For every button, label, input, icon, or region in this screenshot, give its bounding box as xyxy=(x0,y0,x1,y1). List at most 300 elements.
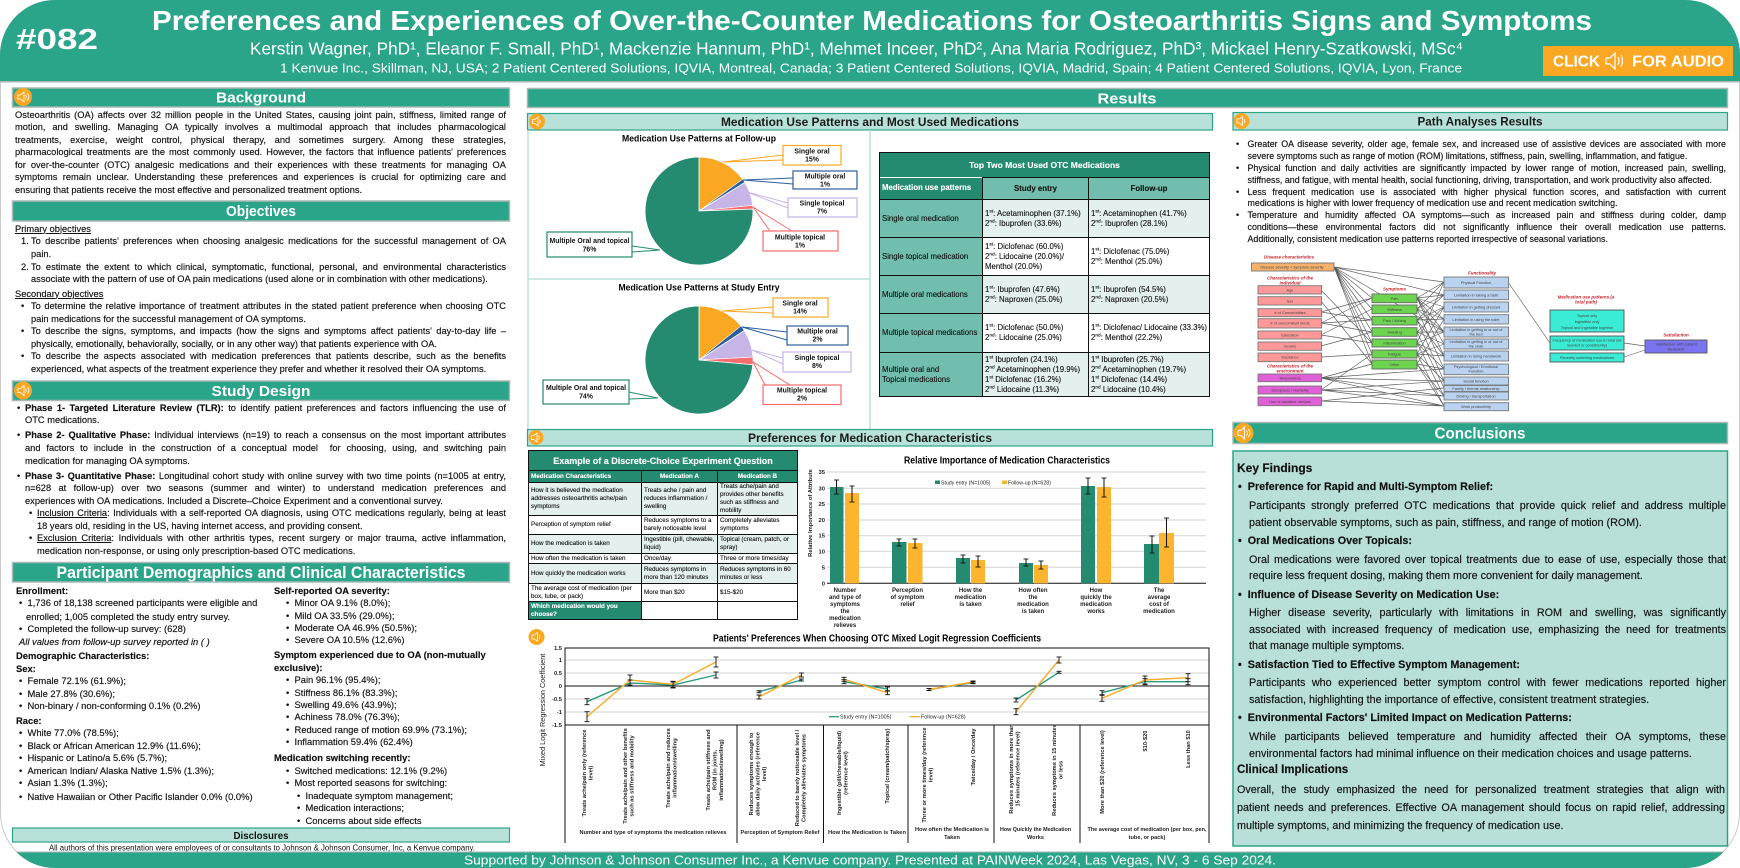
table: discrete-choice experiment example: Topical (cream, patch, or spray) xyxy=(720,536,789,551)
path analysis diagram: Characteristics of the xyxy=(1267,364,1314,368)
subheading: preferences for medication characteristics: Preferences for Medication Characteristics xyxy=(748,433,992,445)
authors: Kerstin Wagner, PhD¹, Eleanor F. Small, PhD¹, Mackenzie Hannum, PhD¹, Mehmet Inceer, PhD², Ana Maria Rodriguez, PhD³, Mickael Henry-Szatkowski, MSc⁴ xyxy=(250,38,1463,58)
subheading: medication use patterns: Medication Use Patterns and Most Used Medications xyxy=(721,117,1019,129)
rotated option labels: Treats ache/pain and reduces xyxy=(666,728,672,808)
rotated option labels: Three or more times/day (reference xyxy=(922,727,928,823)
path analysis diagram: Symptoms xyxy=(1383,286,1406,292)
table: top two most used OTC medications: Multiple oral and xyxy=(882,364,939,374)
attribute labels: Taken xyxy=(944,835,960,841)
table: top two most used OTC medications: Medication use patterns xyxy=(882,183,971,192)
table: top two most used OTC medications: Single topical medication xyxy=(882,252,968,260)
line chart: regression coefficients: -1 xyxy=(557,710,563,716)
subheading: preferences for medication characteristics xyxy=(528,430,1212,446)
panel: path analyses text: conditions—these environmental factors did not significantly influence their overall medication use patterns. xyxy=(1248,222,1726,232)
attribute labels: How often the Medication is xyxy=(915,827,989,833)
line chart: regression coefficients: 0 xyxy=(559,684,562,690)
rotated option labels: level) xyxy=(928,768,934,782)
x axis labels: relief xyxy=(900,602,916,608)
panel: objectives text: experienced, what aspects of the treatment experience they prefer and whether it resolved their OA symptoms. xyxy=(31,364,486,374)
panel: study design text: and factors to include in the construction of a conceptual model for choosing, using, and switching pain xyxy=(25,443,506,453)
line chart: regression coefficients: 0.5 xyxy=(554,671,563,677)
chart title: Relative Importance of Medication Characteristics xyxy=(904,456,1110,466)
column: severity, symptoms and switching: Symptom experienced due to OA (non-mutually xyxy=(274,649,486,660)
path analysis diagram: Pain / Aching xyxy=(1383,318,1406,323)
finding: disease severity: that manage multiple symptoms. xyxy=(1249,640,1404,652)
column: enrollment and demographics: • White 77.0% (78.5%); xyxy=(19,727,119,738)
table: top two most used OTC medications: 2nd: Naproxen (20.5%) xyxy=(1091,294,1168,304)
path analysis diagram: needed or consistently) xyxy=(1567,342,1608,348)
callouts: follow-up: Single oral xyxy=(794,148,830,156)
column: enrollment and demographics: All values from follow-up survey reported in ( ) xyxy=(19,636,210,647)
finding: environmental factors xyxy=(1238,712,1726,760)
panel: objectives text: 1. xyxy=(21,236,29,246)
attribute labels xyxy=(580,827,1207,841)
column: enrollment and demographics xyxy=(16,584,257,802)
conclusions panel background xyxy=(1233,451,1728,846)
table: top two most used OTC medications: 2nd: Menthol (22.2%) xyxy=(1091,333,1162,342)
table: top two most used OTC medications: 2nd: Ibuprofen (33.6%) xyxy=(985,218,1061,228)
path analysis diagram: Limitation in getting in or out of xyxy=(1450,339,1503,344)
panel: study design text: • xyxy=(29,533,32,543)
rotated option labels: 15 minutes (reference level) xyxy=(1016,731,1022,806)
table: discrete-choice experiment example: How the medication is taken xyxy=(531,540,610,547)
column: enrollment and demographics: • Black or African American 12.9% (11.6%); xyxy=(19,740,201,751)
table: top two most used OTC medications: 2nd: Menthol (25.0%) xyxy=(1091,256,1162,266)
table: discrete-choice experiment example: How often the medication is taken xyxy=(531,554,626,562)
panel: study design text: 18 years old, residing in the US, having internet access, and providing consent. xyxy=(37,521,363,531)
panel: conclusions text xyxy=(1237,460,1726,832)
column: severity, symptoms and switching xyxy=(274,584,486,826)
heading: background xyxy=(12,88,510,107)
panel: path analyses text: medications is higher with lower frequency of medication use and recent medication switching. xyxy=(1248,198,1617,208)
finding: disease severity: • Influence of Disease Severity on Medication Use: xyxy=(1238,589,1499,601)
panel: study design text: • xyxy=(29,508,32,518)
column: severity, symptoms and switching: • Medication interactions; xyxy=(297,802,404,813)
panel: background text: treatments, exercise, weight control, physical therapy, and sometimes surgery. Among these strategies, xyxy=(15,135,506,145)
footer xyxy=(0,852,1740,868)
disclosure statement: All authors of this presentation were employees of or consultants to Johnson & Johnson Consumer, Inc, a Kenvue company. xyxy=(49,844,475,852)
table: discrete-choice experiment example: Once/day xyxy=(644,554,671,562)
table: discrete-choice experiment example: Treats ache/pain and provides other benefits such as stiffness and mobility xyxy=(720,483,784,514)
panel: objectives text: To estimate the extent to which clinical, symptomatic, functional, personal, and environmental characteristics xyxy=(31,262,506,272)
table: top two most used OTC medications: 1st: Diclofenac/ Lidocaine (33.3%) xyxy=(1091,323,1207,332)
x axis labels: is taken xyxy=(1022,609,1044,615)
rotated option labels: Completely alleviates symptoms xyxy=(802,734,808,822)
callouts: study entry: Multiple oral xyxy=(797,328,838,336)
table: top two most used OTC medications: 1st Ibuprofen (24.1%) xyxy=(985,354,1058,364)
table: discrete-choice experiment example: Medication B xyxy=(738,472,777,480)
key findings heading: Key Findings xyxy=(1237,460,1312,474)
path analysis diagram xyxy=(1252,254,1707,411)
path analysis diagram: Functionality xyxy=(1468,270,1496,276)
column: severity, symptoms and switching: • Switched medications: 12.1% (9.2%) xyxy=(286,765,447,776)
path analysis diagram: Inflammation xyxy=(1383,340,1406,346)
column: enrollment and demographics: • Completed the follow-up survey: (628) xyxy=(19,623,186,634)
table: discrete-choice experiment example: Reduces symptoms to a barely noticeable level xyxy=(644,517,712,532)
callouts: study entry: 8% xyxy=(812,363,822,370)
pie chart: follow-up xyxy=(622,134,776,265)
x axis labels: medication xyxy=(1143,609,1175,615)
table: discrete-choice experiment example: Medication Characteristics xyxy=(531,472,611,480)
chart title: Patients' Preferences When Choosing OTC Mixed Logit Regression Coefficients xyxy=(713,634,1041,644)
column: enrollment and demographics: • Male 27.8% (30.6%); xyxy=(19,688,115,699)
path analysis diagram: Satisfaction with current xyxy=(1655,342,1698,346)
table: discrete-choice experiment example: Reduces symptoms in more than 120 minutes xyxy=(644,566,708,580)
rotated option labels: More than $20 (reference level) xyxy=(1100,730,1106,814)
panel: background text: motion, and swelling. Managing OA typically involves a multimodal approach that includes pharmacological xyxy=(15,122,506,132)
header banner xyxy=(0,0,1740,82)
x axis labels: Perception xyxy=(892,588,923,594)
table: top two most used OTC medications: 1st: Diclofenac (75.0%) xyxy=(1091,246,1169,256)
table: discrete-choice experiment example: Treats ache / pain and reduces inflammation / swelling xyxy=(644,487,707,510)
callouts: follow-up: 1% xyxy=(795,242,805,250)
column: severity, symptoms and switching: • Stiffness 86.1% (83.3%); xyxy=(286,686,398,698)
subheading: path analyses xyxy=(1233,112,1728,130)
table: top two most used OTC medications: Top Two Most Used OTC Medications xyxy=(969,160,1120,170)
table: top two most used OTC medications: Follow-up xyxy=(1131,184,1167,192)
column: severity, symptoms and switching: • Concerns about side effects xyxy=(297,814,422,826)
rotated option labels: ROM (in joints, xyxy=(712,750,718,790)
table: top two most used OTC medications: Multiple topical medications xyxy=(882,328,977,337)
column: severity, symptoms and switching: • Pain 96.1% (95.4%); xyxy=(286,674,380,685)
table: top two most used OTC medications: 2nd Acetaminophen (19.9%) xyxy=(985,364,1080,374)
title: Preferences and Experiences of Over-the-Counter Medications for Osteoarthritis Signs and Symptoms xyxy=(152,5,1592,36)
x axis labels: cost of xyxy=(1149,602,1170,608)
x axis labels: medication xyxy=(955,595,987,601)
x axis labels: works xyxy=(1086,609,1105,615)
path analysis diagram: Limitation in getting in or out of xyxy=(1450,327,1503,332)
finding: oral over topical: require less frequent dosing, making them more convenient for daily management. xyxy=(1249,570,1643,582)
table: top two most used OTC medications: Multiple oral medications xyxy=(882,290,968,298)
rotated option labels: or less xyxy=(1058,761,1064,779)
table: top two most used OTC medications: 2nd Lidocaine (11.3%) xyxy=(985,384,1059,394)
column: severity, symptoms and switching: • Severe OA 10.5% (12.6%) xyxy=(286,634,404,645)
x axis labels: medication xyxy=(829,616,861,622)
column: enrollment and demographics: • American Indian/ Alaska Native 1.5% (1.3%); xyxy=(19,765,214,776)
path analysis diagram: individual xyxy=(1279,280,1301,286)
path analysis diagram: Other xyxy=(1390,362,1400,367)
panel: objectives text: 2. xyxy=(21,262,29,272)
path analysis diagram: Characteristics of the xyxy=(1267,276,1314,280)
table: discrete-choice experiment example: $15-$20 xyxy=(720,588,743,596)
x axis labels: quickly the xyxy=(1080,595,1112,601)
rotated option labels: Reduces symptoms enough to xyxy=(749,732,755,815)
legend xyxy=(829,714,966,720)
legend: Study entry (N=1005) xyxy=(840,714,892,720)
finding: oral over topical: Oral medications were favored over topical treatments due to ease of use, especially those that xyxy=(1249,554,1726,566)
path analysis diagram: Sex xyxy=(1287,298,1293,304)
table: top two most used OTC medications: 1st: Ibuprofen (47.6%) xyxy=(985,284,1060,294)
clinical implications xyxy=(1237,764,1725,832)
panel: objectives text: To describe the aspects associated with medication preferences that patients describe, such as the benefits xyxy=(31,351,506,361)
heading: study design xyxy=(12,381,510,400)
bar chart: relative importance: 15 xyxy=(819,534,826,540)
path analysis diagram: Age xyxy=(1287,288,1293,292)
path analysis diagram: Disease characteristics xyxy=(1264,254,1315,260)
bar chart: relative importance: 0 xyxy=(822,581,825,587)
table: discrete-choice experiment example: Medication A xyxy=(660,472,699,480)
heading: results xyxy=(528,88,1728,108)
panel: path analyses text: • xyxy=(1236,163,1239,173)
line chart: regression coefficients: -1.5 xyxy=(552,723,563,729)
callouts: follow-up: 15% xyxy=(805,156,819,164)
column: enrollment and demographics: Race: xyxy=(16,715,42,726)
x axis labels: symptoms xyxy=(830,602,861,608)
column: enrollment and demographics: • 1,736 of 18,138 screened participants were eligible and xyxy=(19,597,257,608)
panel: study design text: experiences with OA medications. Included a Discrete–Choice Experiment and a conventional survey. xyxy=(25,496,443,506)
path analysis diagram: Topical only xyxy=(1577,313,1597,318)
panel: participant demographics xyxy=(16,584,486,826)
table: discrete-choice experiment example: More than $20 xyxy=(644,588,685,596)
path analysis diagram: Dampness / Humidity xyxy=(1272,388,1309,392)
callouts: follow-up: 7% xyxy=(817,208,827,216)
legend: Follow-up (N=628) xyxy=(921,714,966,720)
panel: objectives text: • xyxy=(21,301,24,311)
column: severity, symptoms and switching: Self-reported OA severity: xyxy=(274,584,390,596)
panel: study design text: Phase 2- Qualitative Phase: Individual interviews (n=19) to reach a consensus on the most important attributes xyxy=(25,430,506,440)
rotated option labels: such as stiffness and mobility xyxy=(630,735,636,817)
column: severity, symptoms and switching: Medication switching recently: xyxy=(274,752,410,763)
icon: speaker regression chart xyxy=(528,629,544,645)
callouts: study entry xyxy=(543,298,851,404)
callouts: follow-up: Single topical xyxy=(800,200,844,208)
panel: background text: Osteoarthritis (OA) affects over 32 million people in the United States, causing joint pain, stiffness, limited range of xyxy=(15,110,506,120)
table: top two most used OTC medications: 2nd: Naproxen (25.0%) xyxy=(985,294,1062,304)
table: discrete-choice experiment example: Three or more times/day xyxy=(720,554,789,562)
callouts: study entry: 74% xyxy=(579,394,593,400)
rotated option labels xyxy=(582,724,1192,826)
finding: rapid relief xyxy=(1238,481,1726,529)
path analysis diagram: Ingestible only xyxy=(1575,319,1599,324)
table: top two most used OTC medications: Study entry xyxy=(1014,184,1057,192)
table: discrete-choice experiment example: How it is believed the medication addresses osteoarthritis ache/pain symptoms xyxy=(531,487,627,510)
table: top two most used OTC medications: Menthol (20.0%) xyxy=(985,262,1042,270)
path analysis diagram: Use of assistive devices xyxy=(1269,399,1311,404)
rotated option labels: $10-$20 xyxy=(1143,731,1149,751)
path analysis diagram: treatment xyxy=(1668,346,1685,352)
x axis labels: of symptom xyxy=(890,595,925,601)
panel: path analyses text: stiffness, and fatigue, with mental health, social functioning, driving, transportation, and work productivity also affected. xyxy=(1248,175,1712,185)
panel: study design text: Phase 3- Quantitative Phase: Longitudinal cohort study with online survey with two time points (n=1005 at entry, xyxy=(25,471,506,481)
attribute labels: The average cost of medication (per box, pen, xyxy=(1088,827,1207,833)
heading: study design: Study Design xyxy=(212,383,310,400)
table: top two most used OTC medications: 1st: Diclofenac (60.0%) xyxy=(985,242,1063,250)
legend xyxy=(935,480,1051,486)
path analysis diagram: Income xyxy=(1284,344,1296,348)
table: top two most used OTC medications: 1st Ibuprofen (25.7%) xyxy=(1091,354,1164,364)
path analysis diagram: Insurance xyxy=(1281,354,1299,360)
panel: study design text: Inclusion Criteria: Individuals with a self-reported OA diagnosis, using OTC medications regularly, being at least xyxy=(37,508,506,518)
panel: study design text xyxy=(17,403,506,556)
audio button: FOR AUDIO xyxy=(1632,54,1724,70)
heading: results: Results xyxy=(1098,90,1156,108)
path analysis diagram: Function xyxy=(1469,368,1483,374)
rotated option labels: Topical (cream/patch/spray) xyxy=(885,728,891,804)
icon: speaker path analyses xyxy=(1234,113,1250,129)
callouts: follow-up: 76% xyxy=(583,246,596,254)
panel: objectives text: pain. xyxy=(31,249,51,259)
path analysis diagram: Limitation in getting dressed xyxy=(1452,304,1500,310)
callouts: study entry: 14% xyxy=(793,308,807,316)
panel: objectives text: pain medications for the successful management of OA symptoms. xyxy=(31,314,306,324)
rotated option labels: inflammation/swelling) xyxy=(719,739,725,801)
panel: study design text: Exclusion Criteria: Individuals with other arthritis types, recent surgery or major trauma, active inflammation, xyxy=(37,533,506,543)
panel: path analyses text: Physical function and daily activities are significantly impacted by lower range of motion, increased pain, swelling, xyxy=(1248,163,1726,173)
column: enrollment and demographics: Enrollment: xyxy=(16,584,68,596)
column: enrollment and demographics: enrolled; 1,005 completed the study entry survey. xyxy=(26,611,230,622)
line chart: regression coefficients: 1 xyxy=(559,658,563,664)
rotated option labels: Reduces symptoms in more than xyxy=(1009,724,1015,814)
panel: path analyses text: Less frequent medication use is associated with higher physical function scores, and satisfaction with current xyxy=(1248,187,1726,197)
x axis labels: medication xyxy=(1017,602,1049,608)
path analysis diagram: the chair xyxy=(1469,344,1484,348)
path analysis diagram: # of concomitant meds xyxy=(1270,320,1310,326)
panel: study design text: medication non-response, or using only prescription-based OTC medications. xyxy=(37,546,355,556)
bar chart: relative importance: 35 xyxy=(819,470,826,476)
x axis labels: average xyxy=(1148,595,1171,601)
path analysis diagram: Physical Function xyxy=(1461,280,1491,285)
panel: study design text: OTC medications. xyxy=(25,415,99,425)
finding: satisfaction: satisfaction, highlighting the importance of effective, consistent treatment strategies. xyxy=(1249,694,1649,706)
panel: objectives text: Primary objectives xyxy=(15,224,91,234)
x axis labels: and type of xyxy=(829,595,862,601)
table: discrete-choice experiment example: Reduces symptoms in 60 minutes or less xyxy=(720,566,791,580)
finding: disease severity xyxy=(1238,589,1726,652)
table: top two most used OTC medications: 2nd Lidocaine (10.4%) xyxy=(1091,384,1166,394)
path analysis diagram: Education xyxy=(1281,332,1299,338)
path analysis diagram: Recently switching medications xyxy=(1560,355,1614,360)
x axis labels: Number xyxy=(834,588,857,594)
finding: environmental factors: • Environmental Factors' Limited Impact on Medication Patterns: xyxy=(1238,712,1572,724)
path analysis diagram: Family / friends relationship xyxy=(1452,386,1500,391)
panel: background text: symptoms remain unclear. Understanding these preferences and experiences is crucial for optimizing care and xyxy=(15,172,506,182)
callouts: study entry: Multiple Oral and topical xyxy=(546,385,626,392)
callouts: study entry: 2% xyxy=(813,336,822,344)
rotated option labels: Reduces symptoms in 15 minutes xyxy=(1052,724,1058,816)
column: enrollment and demographics: Sex: xyxy=(16,663,36,674)
pie chart: study entry xyxy=(618,282,780,414)
path analysis diagram: total path) xyxy=(1575,300,1597,304)
column: enrollment and demographics: • Female 72.1% (61.9%); xyxy=(19,675,126,686)
rotated option labels: Treats ache/pain and other benefits xyxy=(623,728,629,824)
path analysis diagram: # of Comorbidities xyxy=(1274,310,1306,315)
heading: background: Background xyxy=(216,90,306,106)
path analysis diagram: Temperature xyxy=(1279,375,1301,380)
path analysis diagram: Pain xyxy=(1391,296,1398,301)
path analysis diagram: Limitation in using the toilet xyxy=(1453,317,1500,322)
finding: rapid relief: Participants strongly preferred OTC medications that provide quick relief and address multiple xyxy=(1249,500,1726,512)
finding: environmental factors: environmental factors had minimal influence on their medication choices and usage patterns. xyxy=(1249,748,1692,760)
panel: path analyses text: Additionally, consistent medication use patterns reported irrespective of seasonal variations. xyxy=(1248,234,1608,244)
table: discrete-choice experiment example: Perception of symptom relief xyxy=(531,521,611,528)
column: severity, symptoms and switching: • Inadequate symptom management; xyxy=(297,790,453,801)
path analysis diagram: Disease severity + symptom severity xyxy=(1260,264,1324,270)
path analysis diagram: Limitation in doing handiwork xyxy=(1451,354,1501,358)
table: discrete-choice experiment example: How quickly the medication works xyxy=(531,570,626,576)
table: top two most used OTC medications: Topical medications xyxy=(882,374,950,384)
finding: disease severity: Higher disease severity, particularly with limitations in ROM and swelling, was significantly xyxy=(1249,607,1726,619)
panel: background text: ensuring that patients receive the most effective and personalized treatment options. xyxy=(15,185,362,195)
finding: rapid relief: patient observable symptoms, such as pain, stiffness, and range of motion (ROM). xyxy=(1249,517,1642,529)
table: discrete-choice experiment example: The average cost of medication (per box, tube, or pack) xyxy=(531,584,632,600)
bar chart: relative importance: 20 xyxy=(819,518,825,524)
column: severity, symptoms and switching: • Reduced range of motion 69.9% (73.1%); xyxy=(286,724,467,735)
column: enrollment and demographics: • Non-binary / non-conforming 0.1% (0.2%) xyxy=(19,700,200,711)
line chart: regression coefficients: -0.5 xyxy=(552,697,563,703)
column: enrollment and demographics: • Native Hawaiian or Other Pacific Islander 0.0% (0.0%) xyxy=(19,791,253,802)
x axis labels: How xyxy=(1090,588,1103,594)
path analysis diagram: Satisfaction xyxy=(1663,332,1689,338)
rotated option labels: allow daily activities (reference xyxy=(756,732,762,816)
rotated option labels: Less than $10 xyxy=(1186,730,1192,768)
table: discrete-choice experiment example: Ingestible (pill, chewable, liquid) xyxy=(644,536,714,551)
x axis labels: the xyxy=(1028,595,1038,601)
rotated option labels: (reference level) xyxy=(844,751,850,795)
table: top two most used OTC medications: 1st: Acetaminophen (37.1%) xyxy=(985,208,1081,218)
panel: path analyses text xyxy=(1236,139,1726,244)
column: severity, symptoms and switching: • Most reported seasons for switching: xyxy=(286,777,447,788)
callouts: follow-up: Multiple topical xyxy=(775,234,825,242)
panel: background text: for over-the-counter (OTC) analgesic medications and their experiences with these treatments for managing OA xyxy=(15,160,506,170)
panel: objectives text xyxy=(15,224,506,374)
column: severity, symptoms and switching: • Mild OA 33.5% (29.0%); xyxy=(286,610,395,621)
callouts: follow-up xyxy=(547,146,857,257)
panel: path analyses text: • xyxy=(1236,210,1239,220)
bar chart: relative importance xyxy=(808,456,1206,629)
attribute labels: Number and type of symptoms the medication relieves xyxy=(580,830,726,836)
bar chart: relative importance: 10 xyxy=(819,549,825,555)
panel: objectives text: associate with the pattern of use of OA pain medications (used alone or in combination with other medications). xyxy=(31,274,488,284)
panel: path analyses text: • xyxy=(1236,187,1239,197)
subheading: path analyses: Path Analyses Results xyxy=(1418,116,1542,128)
path analysis diagram: Frequency of medication use in total (as xyxy=(1552,338,1622,342)
line chart: regression coefficients: 1.5 xyxy=(554,646,563,652)
bar chart: relative importance: 5 xyxy=(822,565,826,571)
bar chart: relative importance: Relative Importance of Attribute xyxy=(808,468,814,557)
column: severity, symptoms and switching: • Swelling 49.6% (43.9%); xyxy=(286,699,397,710)
affiliations: 1 Kenvue Inc., Skillman, NJ, USA; 2 Patient Centered Solutions, IQVIA, Montreal, Canada; 3 Patient Centered Solutions, IQVIA, Madrid, Spain; 4 Patient Centered Solutions, IQVIA, Lyon, France xyxy=(280,60,1462,76)
callouts: study entry: Single topical xyxy=(795,355,839,362)
table: discrete-choice experiment example: Example of a Discrete-Choice Experiment Question xyxy=(553,456,773,466)
attribute labels: How the Medication is Taken xyxy=(828,830,907,836)
rotated option labels: Treats ache/pain only (reference xyxy=(582,730,588,816)
x axis labels: the xyxy=(840,609,850,615)
table: top two most used OTC medications xyxy=(879,152,1210,397)
table: top two most used OTC medications: 2nd: Ibuprofen (28.1%) xyxy=(1091,218,1167,228)
clinical implications: patient needs and preferences. Effective OA management should focus on rapid relief, addressing xyxy=(1237,802,1725,814)
path analysis diagram: the bed xyxy=(1470,332,1482,336)
icon: speaker study design xyxy=(14,382,32,400)
clinical implications: Clinical Implications xyxy=(1237,764,1348,776)
icon: speaker conclusions xyxy=(1234,423,1254,443)
finding: rapid relief: • Preference for Rapid and Multi-Symptom Relief: xyxy=(1238,481,1493,493)
rotated option labels: level) xyxy=(588,766,594,780)
attribute labels: How Quickly the Medication xyxy=(1000,827,1072,833)
column: severity, symptoms and switching: • Moderate OA 46.9% (50.5%); xyxy=(286,622,417,633)
path analysis diagram: Driving / transportation xyxy=(1456,394,1496,398)
panel: objectives text: • xyxy=(21,326,24,336)
footer: Supported by Johnson & Johnson Consumer Inc., a Kenvue company. Presented at PAINWeek 2024, Las Vegas, NV, 3 - 6 Sep 2024. xyxy=(464,852,1276,868)
panel: study design text: • xyxy=(17,403,20,413)
rotated option labels: Ingestible (pill/chewable/liquid) xyxy=(837,731,843,815)
heading: disclosures xyxy=(12,828,510,842)
x axis labels: How the xyxy=(959,588,983,594)
path analysis diagram: Social function xyxy=(1463,378,1489,384)
chart title: Medication Use Patterns at Follow-up xyxy=(622,134,776,144)
finding: oral over topical: • Oral Medications Over Topicals: xyxy=(1238,535,1412,547)
rotated option labels: Twice/day / Once/day xyxy=(971,728,977,786)
column: enrollment and demographics: • Hispanic or Latino/a 5.6% (5.7%); xyxy=(19,752,167,763)
